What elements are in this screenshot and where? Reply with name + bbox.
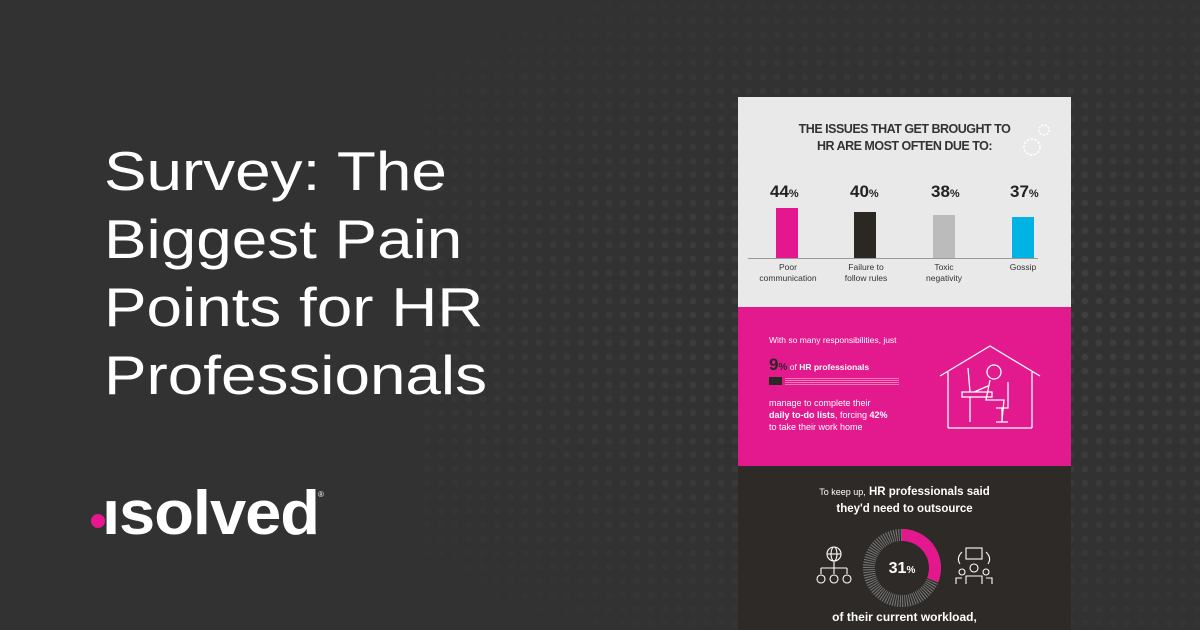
text block: 9% of HR professionals (769, 355, 869, 374)
bar chart: 40% (850, 182, 879, 201)
title: Points for HR (104, 276, 483, 338)
bar chart: 37% (1010, 182, 1039, 201)
donut chart 31%: 31% (889, 560, 915, 577)
bar chart: Poor (779, 262, 797, 272)
donut chart 31% (863, 529, 941, 607)
text block: With so many responsibilities, just (769, 335, 897, 345)
heading: HR ARE MOST OFTEN DUE TO: (817, 139, 992, 153)
title: Biggest Pain (104, 208, 462, 270)
panel: outsource (738, 466, 1071, 630)
bar chart: 44% (770, 182, 799, 201)
icon: team briefcase (955, 547, 993, 584)
text block (769, 335, 899, 432)
text block: manage to complete their (769, 398, 871, 408)
heading: To keep up, HR professionals said (819, 486, 990, 498)
bar chart (748, 182, 1039, 283)
bar chart: Failure to (848, 262, 884, 272)
title: Professionals (104, 344, 487, 406)
bar chart: negativity (926, 273, 962, 283)
logo: isolved: ® (318, 490, 324, 499)
heading (819, 486, 990, 515)
panel: to-do lists (738, 307, 1071, 466)
icon: person working at home (940, 345, 1040, 429)
title: Survey: The (104, 140, 447, 202)
panel: issues (738, 97, 1071, 307)
text block: daily to-do lists, forcing 42% (769, 410, 888, 420)
title (104, 140, 487, 406)
infographic card (738, 97, 1071, 630)
bar chart: follow rules (845, 273, 887, 283)
icon: globe network (816, 546, 852, 584)
bar chart: communication (759, 273, 817, 283)
logo: isolved: ısolved (102, 479, 319, 548)
heading: they'd need to outsource (836, 503, 973, 515)
text block: to take their work home (769, 422, 863, 432)
background dot pattern (622, 148, 1200, 482)
bar chart: 38% (931, 182, 960, 201)
text: of their current workload: of their current workload, (832, 610, 977, 624)
icon: gears (1023, 124, 1050, 156)
heading (798, 122, 1010, 153)
bar chart: Gossip (1010, 262, 1036, 272)
bar chart: Toxic (934, 262, 954, 272)
heading: THE ISSUES THAT GET BROUGHT TO (799, 122, 1010, 136)
